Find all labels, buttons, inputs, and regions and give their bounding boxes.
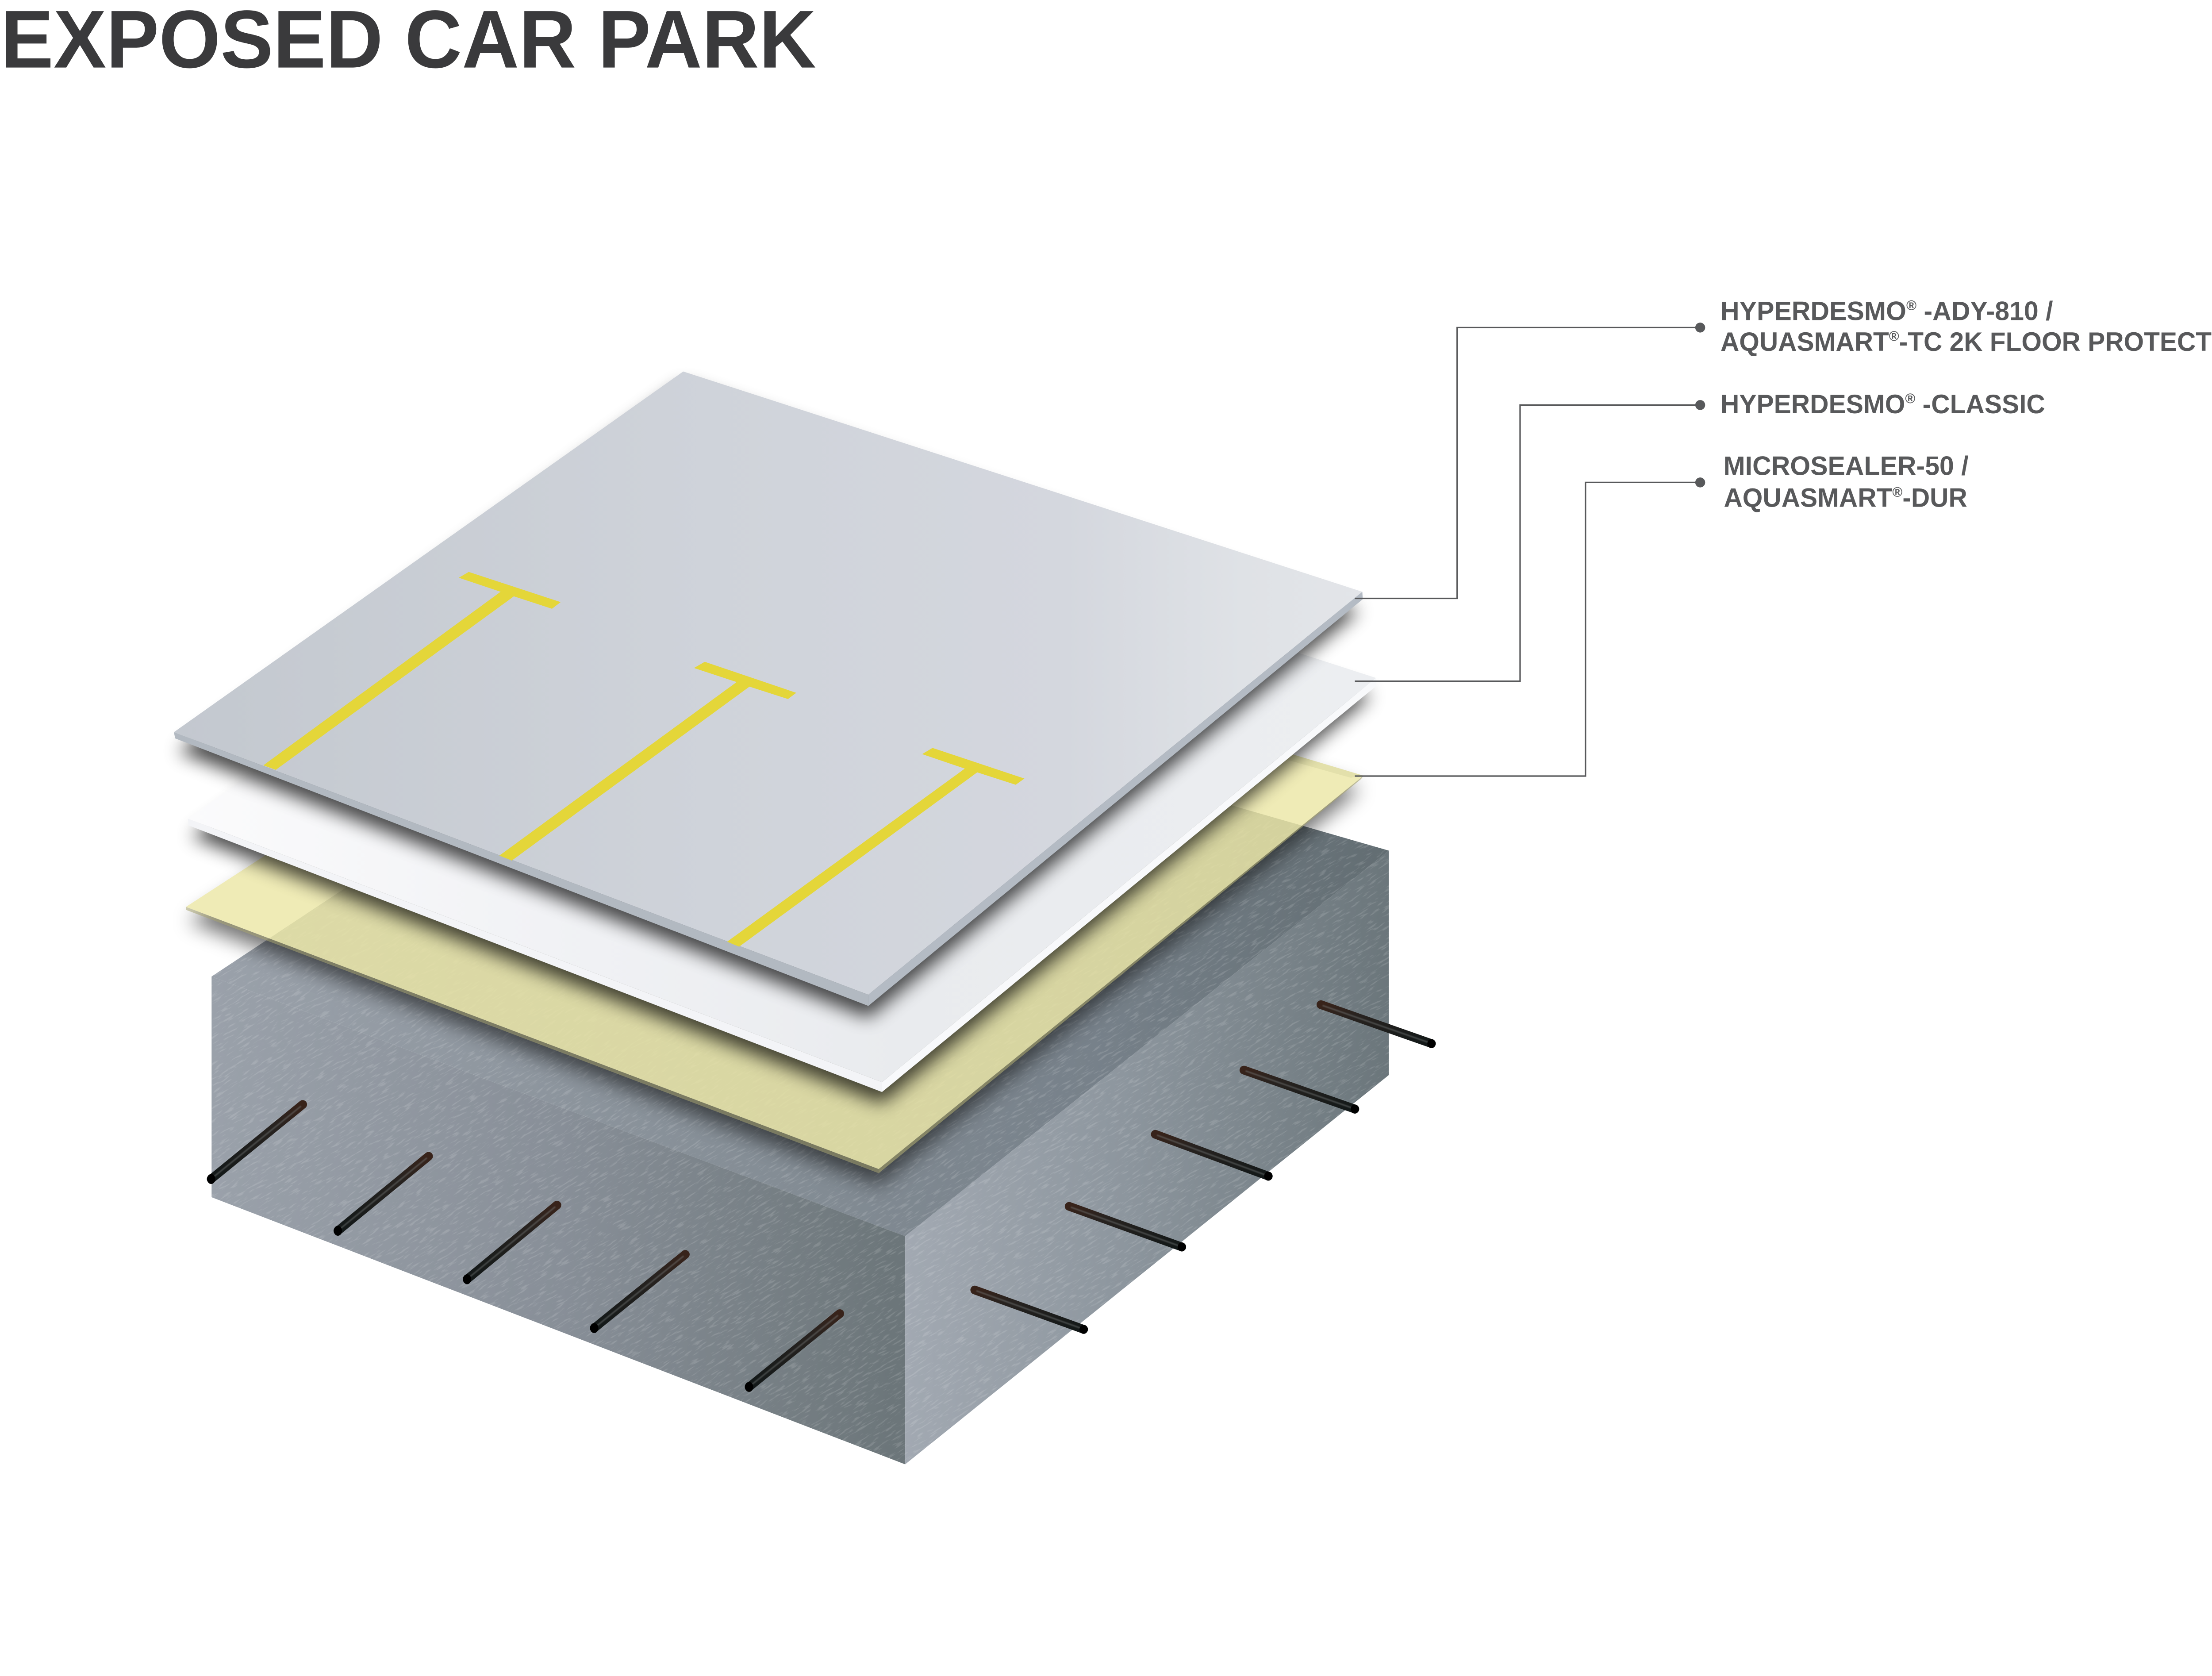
rebar R5 bbox=[1321, 1005, 1436, 1048]
rebars on right face bbox=[975, 1005, 1436, 1334]
callout leader 3 bbox=[1355, 477, 1705, 776]
label: primer products: ® bbox=[1892, 484, 1902, 500]
callout leader 1 bbox=[1355, 323, 1705, 598]
label: membrane product: HYPERDESMO bbox=[1720, 389, 1909, 419]
parking marking 2 bbox=[499, 662, 796, 861]
label: top coating products: AQUASMART bbox=[1720, 327, 1893, 357]
parking marking 3 bbox=[727, 748, 1025, 947]
yellow primer layer bbox=[183, 754, 1366, 1193]
block top face bbox=[211, 653, 1389, 1236]
white layer left edge bbox=[188, 819, 882, 1092]
rebar R2 bbox=[1069, 1207, 1186, 1252]
callout leader 2 bbox=[1355, 400, 1705, 681]
top layer left edge bbox=[174, 732, 868, 1006]
label: membrane product: ® bbox=[1905, 391, 1915, 407]
rebars on left face bbox=[207, 1104, 840, 1392]
label: membrane product: -CLASSIC bbox=[1915, 389, 2045, 419]
top layer surface bbox=[174, 372, 1362, 995]
label: top coating products: -TC 2K FLOOR PROTECT bbox=[1899, 327, 2212, 357]
rebar R1 bbox=[975, 1290, 1088, 1334]
label: primer products: MICROSEALER-50 / bbox=[1724, 451, 1969, 481]
concrete block bbox=[211, 805, 1389, 1465]
yellow layer shadow bbox=[183, 758, 1366, 1193]
yellow layer back edge bbox=[1221, 733, 1363, 778]
white layer surface bbox=[188, 458, 1376, 1082]
label: primer products bbox=[1724, 451, 1969, 513]
label: top coating products: ® bbox=[1889, 328, 1899, 344]
block left face bbox=[211, 976, 905, 1465]
rebar L2 bbox=[334, 1156, 429, 1236]
rebar L1 bbox=[207, 1104, 303, 1184]
label: primer products: AQUASMART bbox=[1724, 483, 1896, 513]
yellow layer surface bbox=[186, 575, 1363, 1169]
label: top coating products: HYPERDESMO bbox=[1720, 296, 1909, 326]
white layer shadow bbox=[191, 472, 1371, 1103]
rebar R4 bbox=[1244, 1070, 1359, 1114]
yellow layer left edge bbox=[186, 907, 879, 1173]
parking marking 1 bbox=[263, 572, 561, 770]
yellow layer right edge bbox=[879, 776, 1363, 1173]
top layer right edge bbox=[868, 592, 1363, 1006]
rebar L4 bbox=[590, 1254, 685, 1333]
white layer right edge bbox=[882, 678, 1376, 1092]
label: top coating products: -ADY-810 / bbox=[1916, 296, 2053, 326]
top coating layer bbox=[174, 372, 1363, 1018]
block right face bbox=[905, 851, 1389, 1465]
rebar L5 bbox=[745, 1314, 840, 1392]
white membrane layer bbox=[188, 458, 1376, 1103]
label: top coating products: ® bbox=[1906, 297, 1916, 313]
rebar R3 bbox=[1155, 1134, 1272, 1180]
top layer shadow bbox=[178, 385, 1359, 1018]
rebar L3 bbox=[463, 1205, 557, 1284]
label: primer products: -DUR bbox=[1902, 483, 1967, 513]
concrete texture bbox=[211, 828, 1389, 1461]
label: top coating products bbox=[1720, 296, 2212, 357]
